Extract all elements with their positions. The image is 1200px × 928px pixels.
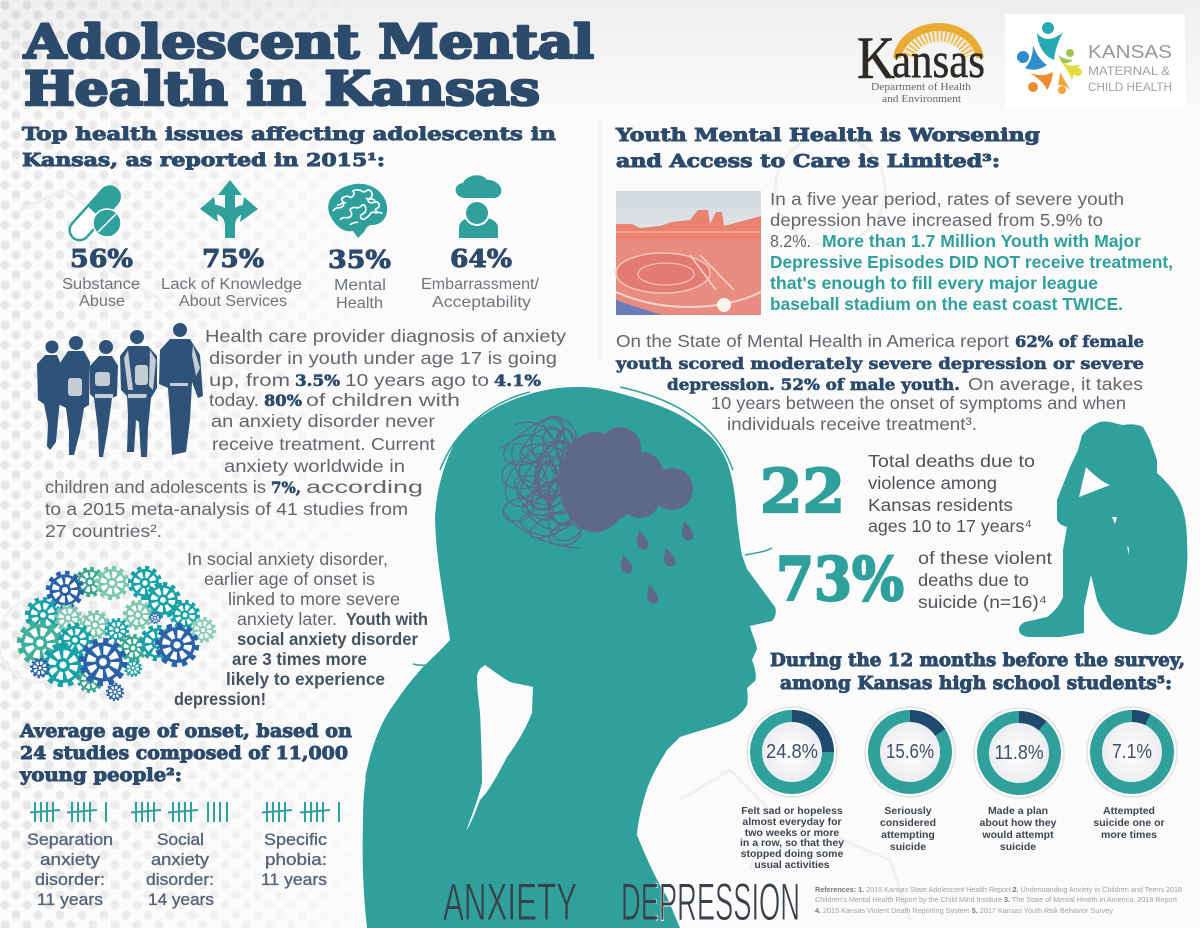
text block: anxiety diagnosis: according bbox=[306, 477, 423, 497]
label: separation anxiety: 11 years bbox=[37, 891, 103, 909]
text block: anxiety diagnosis: of children with bbox=[306, 390, 460, 410]
stat: 75 percent bbox=[161, 244, 302, 310]
text block: state of mental health: 62% of female bbox=[1015, 332, 1144, 351]
text block: state of mental health: On the State of Mental Health in America report bbox=[616, 331, 1009, 351]
title bbox=[23, 15, 594, 117]
text block: social anxiety: anxiety later. bbox=[237, 609, 337, 629]
donut chart: 7.1 percent: Attempted bbox=[1103, 805, 1155, 817]
label: social anxiety: 14 years bbox=[148, 891, 214, 909]
text block: state of mental health: youth scored moderately severe depression or severe bbox=[615, 354, 1144, 373]
heading: youth mental health worsening: and Access to Care is Limited³: bbox=[616, 152, 1000, 172]
stat: 56 percent bbox=[62, 244, 140, 310]
donut chart: 24.8 percent: usual activities bbox=[754, 859, 830, 871]
stat: 22 deaths bbox=[760, 451, 1035, 536]
text block: social anxiety bbox=[174, 549, 428, 709]
logo: Kansas Department of Health and Environment: ansas bbox=[892, 32, 985, 88]
silhouette bbox=[363, 387, 776, 928]
heading: average age of onset: Average age of onset, based on bbox=[19, 722, 352, 742]
text block: social anxiety: Youth with bbox=[346, 609, 428, 629]
hair strands bbox=[366, 387, 772, 778]
stat: 22 deaths: ages 10 to 17 years⁴ bbox=[868, 516, 1032, 536]
donut chart: 24.8 percent: almost everyday for bbox=[742, 816, 842, 828]
illustration: sitting figure bbox=[1019, 421, 1187, 637]
heading: top health issues: Top health issues affecting adolescents in bbox=[22, 125, 556, 145]
text block: anxiety diagnosis bbox=[45, 326, 566, 541]
stat: 73 percent suicide: of these violent bbox=[918, 548, 1052, 568]
text block: anxiety diagnosis: 4.1% bbox=[494, 371, 541, 390]
text block: anxiety diagnosis: 7%, bbox=[271, 478, 301, 497]
references: References: 1. 2015 Kansas State Adolescent Health Report 2. Understanding Anxiety in Children and Teens 2018 bbox=[815, 887, 1182, 894]
label: separation anxiety bbox=[27, 831, 113, 909]
logo: Kansas Maternal and Child Health: CHILD HEALTH bbox=[1088, 80, 1172, 94]
text block: severe depression rates: More than 1.7 Million Youth with Major bbox=[822, 231, 1141, 251]
tally: 11 marks bbox=[262, 802, 339, 822]
text block: anxiety diagnosis: children and adolescents is bbox=[45, 477, 266, 497]
heading: top health issues: Kansas, as reported in 2015¹: bbox=[22, 151, 385, 171]
text block: severe depression rates: 8.2%. bbox=[770, 231, 811, 251]
tally: 11 marks bbox=[30, 802, 106, 822]
stat: 22 deaths: violence among bbox=[868, 473, 997, 493]
text block: severe depression rates: In a five year period, rates of severe youth bbox=[770, 189, 1124, 209]
stat: 35 percent bbox=[328, 245, 391, 312]
references bbox=[815, 887, 1182, 915]
text block: severe depression rates: depression have increased from 5.9% to bbox=[770, 210, 1103, 230]
stat: 64 percent bbox=[421, 244, 540, 311]
text block: social anxiety: are 3 times more bbox=[232, 649, 367, 669]
label: separation anxiety: anxiety bbox=[40, 851, 101, 869]
donut chart: 15.6 percent: considered bbox=[880, 817, 936, 829]
icon: group of teenagers walking away bbox=[37, 323, 203, 457]
text block: severe depression rates: Depressive Episodes DID NOT receive treatment, bbox=[770, 252, 1173, 272]
tally: 14 marks bbox=[131, 802, 227, 822]
label: social anxiety: disorder: bbox=[146, 871, 214, 889]
heading: average age of onset bbox=[19, 722, 352, 786]
text block: anxiety diagnosis: 10 years ago to bbox=[345, 370, 489, 390]
text block: anxiety diagnosis: to a 2015 meta-analysis of 41 studies from bbox=[45, 499, 408, 519]
panel: top health issues bbox=[22, 125, 556, 312]
text block: anxiety diagnosis: anxiety worldwide in bbox=[224, 456, 405, 476]
text block: state of mental health: individuals receive treatment³. bbox=[727, 414, 977, 434]
donut chart: 24.8 percent: two weeks or more bbox=[745, 827, 839, 839]
text block: anxiety diagnosis: disorder in youth under age 17 is going bbox=[209, 348, 557, 368]
stat: 75 percent: 75% bbox=[202, 244, 264, 273]
stat: 35 percent: Health bbox=[336, 295, 383, 312]
stat: 22 deaths: Total deaths due to bbox=[868, 451, 1035, 471]
text block: anxiety diagnosis: 3.5% bbox=[295, 371, 340, 390]
stat: 56 percent: Substance bbox=[62, 276, 140, 293]
scribble bbox=[495, 411, 600, 549]
stat: 64 percent: Acceptability bbox=[432, 294, 531, 311]
stat: 73 percent suicide: 73% bbox=[776, 545, 904, 615]
donut chart: 15.6 percent bbox=[865, 707, 955, 853]
illustration: head silhouette with storm cloud bbox=[363, 387, 776, 928]
text block: social anxiety: likely to experience bbox=[226, 669, 385, 689]
donut chart: 11.8 percent: 11.8% bbox=[994, 742, 1044, 764]
text block: social anxiety: depression! bbox=[174, 689, 266, 709]
label: separation anxiety: Separation bbox=[27, 831, 113, 849]
text block: anxiety diagnosis: today. bbox=[209, 390, 259, 410]
storm cloud bbox=[559, 427, 693, 532]
label: specific phobia bbox=[261, 831, 327, 889]
rain drops bbox=[621, 521, 693, 604]
stat: 22 deaths: Kansas residents bbox=[868, 495, 1013, 515]
label: separation anxiety: disorder: bbox=[35, 871, 105, 889]
panel: average age of onset bbox=[19, 722, 352, 909]
label: social anxiety: Social bbox=[157, 831, 204, 849]
logo: Kansas Department of Health and Environment: K bbox=[857, 25, 895, 91]
text block: anxiety diagnosis: receive treatment. Current bbox=[212, 434, 435, 454]
title: Adolescent Mental bbox=[23, 15, 594, 70]
text block: anxiety diagnosis: 80% bbox=[264, 391, 302, 410]
logo: Kansas Department of Health and Environment bbox=[857, 23, 985, 105]
label: social anxiety: anxiety bbox=[151, 851, 210, 869]
logo: Kansas Maternal and Child Health: MATERNAL & bbox=[1088, 64, 1170, 78]
donut chart: 24.8 percent: Felt sad or hopeless bbox=[741, 805, 843, 817]
stat: 73 percent suicide: suicide (n=16)⁴ bbox=[918, 592, 1047, 612]
text block: social anxiety: earlier age of onset is bbox=[204, 569, 375, 589]
donut chart: 11.8 percent: suicide bbox=[1000, 841, 1036, 853]
text block: anxiety diagnosis: Health care provider diagnosis of anxiety bbox=[205, 326, 566, 346]
icon: person under cloud bbox=[456, 175, 501, 238]
label: social anxiety bbox=[146, 831, 214, 909]
donut chart: 15.6 percent: Seriously bbox=[884, 805, 932, 817]
text block: state of mental health bbox=[615, 331, 1144, 434]
text block: severe depression rates: that's enough to fill every major league bbox=[770, 273, 1098, 293]
label: specific phobia: Specific bbox=[264, 831, 327, 849]
text block: social anxiety: linked to more severe bbox=[228, 589, 400, 609]
text block: state of mental health: 10 years between the onset of symptoms and when bbox=[711, 393, 1126, 413]
text block: state of mental health: On average, it takes bbox=[968, 374, 1143, 394]
references: 4. 2015 Kansas Violent Death Reporting System 5. 2017 Kansas Youth Risk Behavior Survey bbox=[815, 908, 1114, 915]
stat: 75 percent: About Services bbox=[179, 293, 287, 310]
text block: anxiety diagnosis: an anxiety disorder never bbox=[211, 411, 435, 431]
logo: Kansas Maternal and Child Health: KANSAS bbox=[1088, 41, 1172, 62]
stat: 73 percent suicide: deaths due to bbox=[918, 570, 1029, 590]
donut chart: 15.6 percent: attempting bbox=[881, 829, 935, 841]
stat: 56 percent: 56% bbox=[70, 244, 133, 273]
heading: average age of onset: young people²: bbox=[19, 766, 182, 786]
text block: state of mental health: depression. 52% of male youth. bbox=[667, 375, 960, 394]
text block: anxiety diagnosis: up, from bbox=[209, 370, 290, 390]
heading: youth mental health worsening bbox=[615, 126, 1040, 172]
donut chart: 15.6 percent: suicide bbox=[890, 841, 926, 853]
donut chart: 11.8 percent: about how they bbox=[980, 817, 1057, 829]
donut chart: 7.1 percent bbox=[1087, 707, 1177, 841]
stat: 64 percent: 64% bbox=[450, 244, 512, 273]
text block: severe depression rates bbox=[770, 189, 1173, 314]
title: Health in Kansas bbox=[24, 62, 540, 117]
icon: pill bbox=[65, 183, 124, 244]
donut chart: 7.1 percent: 7.1% bbox=[1112, 741, 1152, 763]
logo: Kansas Maternal and Child Health bbox=[1005, 14, 1185, 108]
label: specific phobia: phobia: bbox=[265, 851, 327, 869]
icon: brain bbox=[328, 184, 387, 238]
donut chart: 7.1 percent: suicide one or bbox=[1093, 817, 1165, 829]
stat: 22 deaths: 22 bbox=[760, 457, 845, 527]
icon: three-way arrows bbox=[200, 180, 258, 238]
image: baseball stadium illustration bbox=[616, 191, 761, 315]
label: specific phobia: 11 years bbox=[261, 871, 327, 889]
heading: youth mental health worsening: Youth Mental Health is Worsening bbox=[615, 126, 1040, 146]
donut chart: 24.8 percent: 24.8% bbox=[766, 741, 818, 763]
heading: top health issues bbox=[22, 125, 556, 171]
donut chart: 7.1 percent: more times bbox=[1101, 829, 1157, 841]
donut chart: 11.8 percent: would attempt bbox=[981, 829, 1054, 841]
stat: 35 percent: Mental bbox=[334, 277, 386, 294]
stat: 73 percent suicide bbox=[776, 545, 1052, 615]
heading: 12 months survey bbox=[770, 651, 1185, 694]
donut chart: 15.6 percent: 15.6% bbox=[886, 741, 934, 763]
references: Children's Mental Health Report by the Child Mind Institute 3. The State of Mental Health in America, 2018 Report bbox=[815, 897, 1177, 904]
heading: 12 months survey: During the 12 months before the survey, bbox=[770, 651, 1185, 671]
logo: Kansas Department of Health and Environment: and Environment bbox=[882, 94, 961, 105]
large words: anxiety and depression bbox=[443, 873, 800, 928]
donut chart: 11.8 percent: Made a plan bbox=[988, 805, 1048, 817]
text block: social anxiety: social anxiety disorder bbox=[237, 629, 418, 649]
heading: 12 months survey: among Kansas high school students⁵: bbox=[780, 674, 1172, 694]
logo: Kansas Department of Health and Environment: Department of Health bbox=[871, 82, 971, 93]
text block: social anxiety: In social anxiety disorder, bbox=[187, 549, 388, 569]
donut chart: 24.8 percent bbox=[740, 707, 844, 871]
stat: 35 percent: 35% bbox=[328, 245, 391, 274]
donut chart: 24.8 percent: in a row, so that they bbox=[740, 837, 844, 849]
text block: severe depression rates: baseball stadium on the east coast TWICE. bbox=[770, 294, 1123, 314]
text block: anxiety diagnosis: 27 countries². bbox=[45, 521, 162, 541]
donut chart: 11.8 percent bbox=[974, 708, 1064, 853]
stat: 56 percent: Abuse bbox=[79, 293, 125, 310]
donut chart: 24.8 percent: stopped doing some bbox=[741, 848, 843, 860]
stat: 75 percent: Lack of Knowledge bbox=[161, 276, 302, 293]
icon: brain made of gears bbox=[19, 568, 215, 700]
heading: average age of onset: 24 studies composed of 11,000 bbox=[20, 744, 348, 764]
stat: 64 percent: Embarrassment/ bbox=[421, 276, 540, 293]
